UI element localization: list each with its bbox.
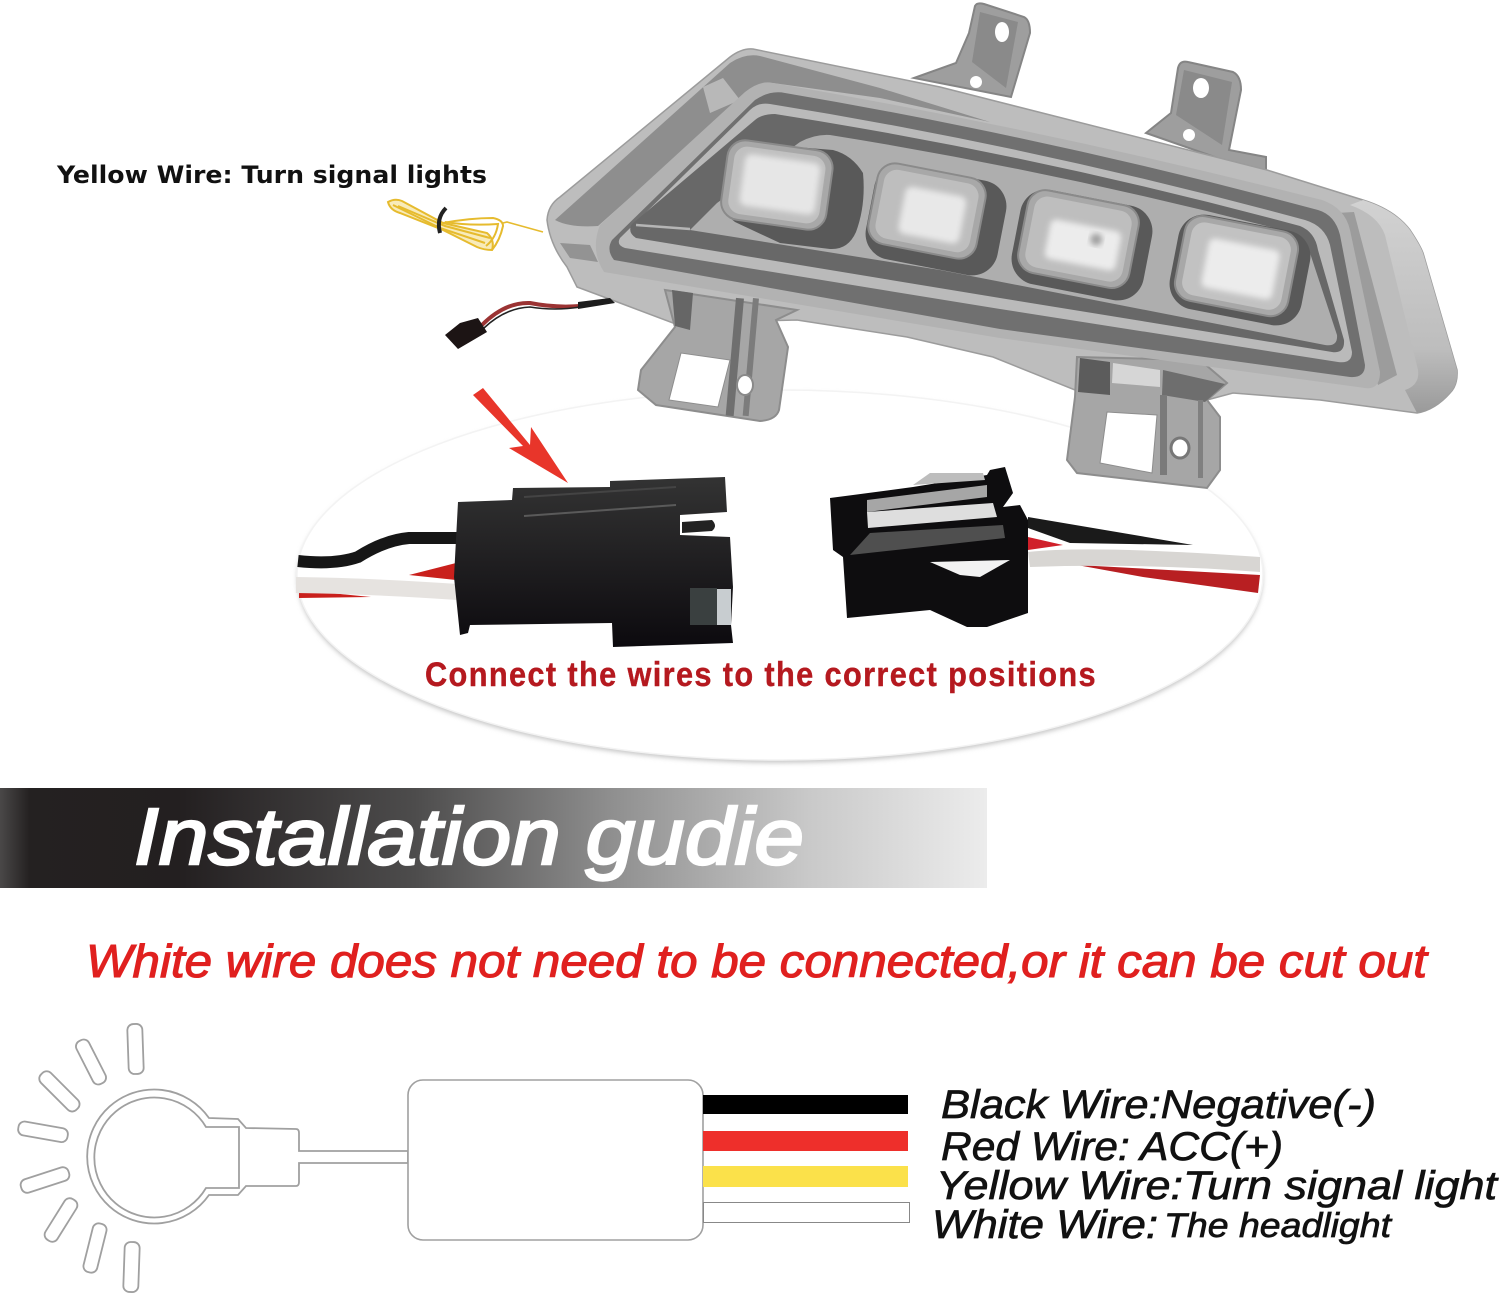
lens 2 — [865, 160, 989, 262]
outer recess — [555, 55, 990, 226]
red warning line: White wire does not need to be connected,or it can be cut out — [86, 935, 1429, 987]
banner — [0, 788, 987, 888]
yellow wire coil — [388, 200, 543, 250]
lamp housing body — [547, 49, 1457, 413]
lens 4 — [1172, 213, 1301, 319]
controller box — [408, 1080, 703, 1240]
lens 3 — [1015, 187, 1142, 291]
wire legend: White Wire: — [932, 1203, 1158, 1247]
connector callout ellipse — [297, 390, 1263, 763]
end cap — [1350, 200, 1457, 413]
wire legend: Yellow Wire:Turn signal light — [936, 1164, 1499, 1208]
body — [830, 467, 1028, 627]
lens panel — [690, 135, 1337, 345]
top mounting bracket left — [914, 3, 1030, 97]
wires — [1028, 517, 1193, 545]
left connector photo — [296, 477, 733, 647]
bevel ring — [596, 82, 1380, 388]
wires — [298, 538, 458, 562]
mid stripe — [619, 104, 1352, 362]
top mounting bracket right — [1146, 62, 1266, 175]
lower mounting bracket right — [1067, 357, 1227, 488]
body — [454, 477, 733, 647]
wire colour bars — [703, 1095, 910, 1222]
dark band — [609, 92, 1365, 377]
wire legend: Red Wire: ACC(+) — [941, 1125, 1283, 1169]
red arrow — [473, 388, 568, 483]
right connector photo — [830, 467, 1260, 627]
wire tie — [439, 208, 446, 233]
label: yellow wire: Yellow Wire: Turn signal lights — [56, 161, 487, 189]
lens pockets — [723, 143, 1315, 330]
wire legend: The headlight — [1164, 1207, 1393, 1245]
lens 1 — [719, 138, 835, 232]
icon: bulb with rays — [17, 1024, 408, 1292]
wire legend — [932, 1083, 1499, 1247]
red and black wire harness with plug — [445, 298, 615, 349]
caption: connect the wires: Connect the wires to the correct positions — [425, 656, 1097, 694]
headlight lamp assembly — [547, 3, 1457, 488]
inner dark band — [630, 114, 1344, 352]
right bevel stripe — [1337, 212, 1397, 385]
banner title: Installation gudie — [134, 792, 804, 881]
wire legend: Black Wire:Negative(-) — [941, 1083, 1376, 1127]
lower mounting bracket left — [638, 290, 797, 421]
